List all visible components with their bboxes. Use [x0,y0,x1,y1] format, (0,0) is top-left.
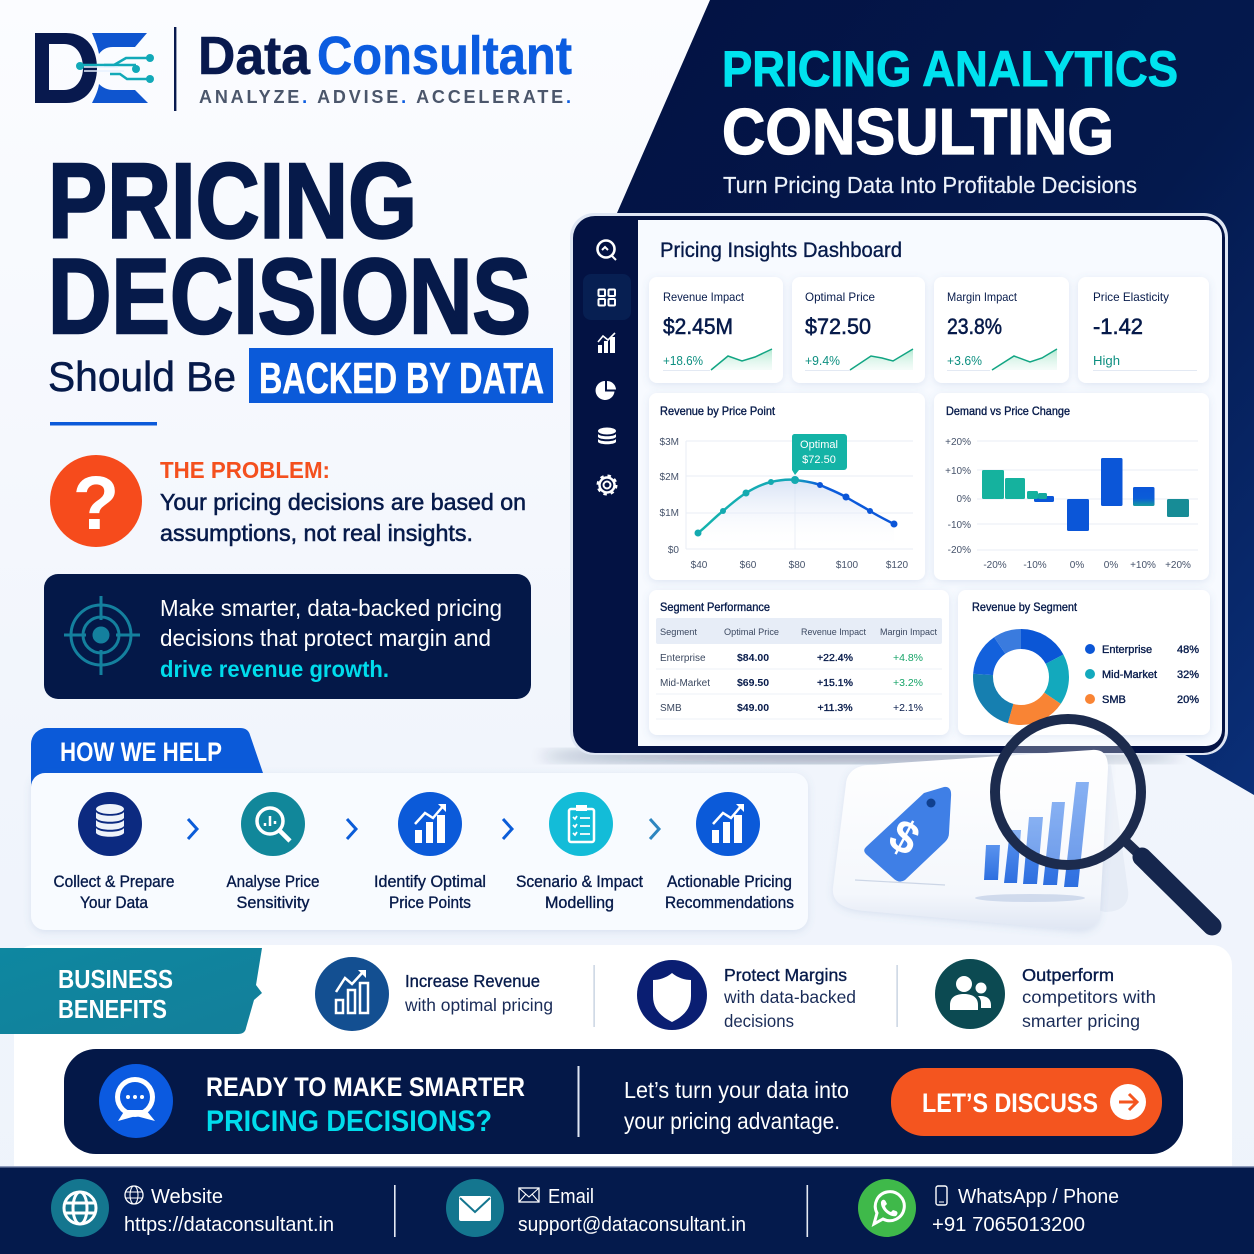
email [446,1179,746,1237]
arrow [503,819,512,839]
table: segment performance: Segment Performance [660,600,770,614]
benefits tab [0,948,262,1034]
KPI cards: +9.4% [805,353,840,368]
whatsapp [858,1179,1119,1237]
line chart: revenue by price point [649,393,925,580]
website: https://dataconsultant.in [124,1214,334,1236]
table: segment performance [649,590,949,735]
email: Email [548,1186,594,1208]
benefit 2 [637,960,856,1031]
how we help tab: HOW WE HELP [60,737,222,767]
bar chart: demand vs price change: -20% [983,560,1007,571]
KPI cards: Optimal Price [805,290,875,304]
benefit 1 [315,957,553,1031]
whatsapp: WhatsApp / Phone [958,1186,1119,1208]
step 4: Modelling [545,894,614,912]
donut chart: revenue by segment: 20% [1177,694,1199,706]
step 1 [54,792,174,912]
bar chart: demand vs price change: Demand vs Price Change [946,404,1070,418]
table: segment performance: Revenue Impact [801,627,866,638]
tagline: ANALYZE. ADVISE. ACCELERATE. [199,87,571,107]
logo [35,33,154,103]
step 1: Collect & Prepare [54,873,174,891]
arrow [188,819,197,839]
bar chart: demand vs price change: 0% [957,494,971,505]
KPI cards: $2.45M [663,314,733,339]
bar chart: demand vs price change: -10% [948,520,971,531]
call to action banner: your pricing advantage. [624,1108,840,1134]
footer [0,1166,1254,1254]
button: let's discuss: LET’S DISCUSS [922,1088,1098,1118]
KPI cards: $72.50 [805,314,871,339]
the problem text: Your pricing decisions are based on [160,489,526,515]
the problem text: assumptions, not real insights. [160,520,473,546]
bar chart: demand vs price change [934,393,1209,580]
call to action banner [64,1049,1183,1154]
table: segment performance: +2.1% [893,702,923,714]
the problem text [160,457,526,546]
benefits tab: BUSINESS [58,964,173,994]
how we help tab [31,728,263,790]
sparkline 3 [992,349,1057,370]
solution panel: decisions that protect margin and [160,625,491,651]
icon: question mark [50,455,142,547]
step 5 [665,792,794,912]
button: let's discuss [891,1068,1162,1136]
solution panel [44,574,531,699]
solution panel: drive revenue growth. [160,656,389,682]
brand name [198,26,572,86]
illustration: price tag, bars and magnifier [833,719,1212,930]
table: segment performance: Segment [660,627,697,638]
bar chart: demand vs price change: +10% [945,466,971,477]
step 4 [516,792,643,912]
line chart: revenue by price point: $60 [740,560,757,571]
dashboard tablet [570,213,1228,755]
table: segment performance: +11.3% [817,702,853,714]
table: segment performance: SMB [660,703,682,714]
bar chart: demand vs price change: 0% [1104,560,1118,571]
bar chart: demand vs price change: +10% [1130,560,1156,571]
bar chart: demand vs price change: -20% [948,545,971,556]
right title: Turn Pricing Data Into Profitable Decisions [723,172,1137,198]
table: segment performance: $69.50 [737,677,769,689]
bar chart: demand vs price change: +20% [945,437,971,448]
bars [984,782,1089,887]
right title [722,41,1178,198]
arrow [650,819,659,839]
tooltip: optimal price: $72.50 [802,454,836,466]
right title: CONSULTING [722,95,1114,168]
main heading: DECISIONS [48,236,531,356]
brand name: Data [198,26,311,86]
tablet shadow [540,749,1180,763]
donut chart: revenue by segment [958,590,1210,735]
line chart: revenue by price point: $120 [886,560,909,571]
KPI cards: +18.6% [663,353,703,368]
benefit 2: with data-backed [723,987,856,1007]
step 1: Your Data [80,894,149,912]
benefit 3: competitors with [1022,987,1156,1007]
KPI cards: Revenue Impact [663,290,745,304]
tooltip: optimal price [792,434,847,475]
line chart: revenue by price point: $2M [660,472,679,483]
KPI cards: 23.8% [947,314,1002,339]
line chart: revenue by price point: $40 [691,560,708,571]
step 5: Recommendations [665,894,794,912]
arrow [347,819,356,839]
donut chart: revenue by segment: Mid-Market [1102,669,1157,681]
navy diagonal background panel [617,0,1254,795]
KPI cards [649,277,1209,383]
step 5: Actionable Pricing [667,873,792,891]
donut chart: revenue by segment: 32% [1177,669,1199,681]
benefit 1: Increase Revenue [405,971,540,991]
step 4: Scenario & Impact [516,873,643,891]
table: segment performance: +3.2% [893,677,923,689]
icon: chat [99,1064,173,1138]
table: segment performance: Mid-Market [660,678,710,689]
table: segment performance: +22.4% [817,652,853,664]
KPI cards: -1.42 [1093,314,1143,339]
step 3: Identify Optimal [374,873,486,891]
call to action banner: Let’s turn your data into [624,1077,849,1103]
sidebar icons [583,240,631,494]
website [51,1179,334,1237]
line chart: revenue by price point: $0 [668,545,679,556]
call to action banner: READY TO MAKE SMARTER [206,1072,525,1102]
table: segment performance: $49.00 [737,702,769,714]
line chart: revenue by price point: $80 [789,560,806,571]
benefit 3: Outperform [1022,965,1114,985]
icon: question mark: ? [73,461,119,546]
bar chart: demand vs price change: 0% [1070,560,1084,571]
bar chart: demand vs price change: +20% [1165,560,1191,571]
benefit 2: Protect Margins [724,965,847,985]
table: segment performance: +4.8% [893,652,923,664]
email: support@dataconsultant.in [518,1214,746,1236]
right title: PRICING ANALYTICS [722,41,1178,97]
business benefits panel [0,945,1232,1185]
solution panel: Make smarter, data-backed pricing [160,595,502,621]
price tag: $ [881,808,928,866]
table: segment performance: +15.1% [817,677,853,689]
donut chart: revenue by segment: Revenue by Segment [972,600,1078,614]
benefits tab: BENEFITS [58,994,167,1024]
donut chart: revenue by segment: SMB [1102,694,1126,706]
sparkline 2 [850,349,913,370]
donut chart: revenue by segment: 48% [1177,644,1199,656]
KPI cards: Margin Impact [947,290,1018,304]
main heading: PRICING [48,140,417,260]
step 3: Price Points [389,894,471,912]
dashboard title: Pricing Insights Dashboard [660,238,902,262]
main heading: Should Be [48,353,236,400]
KPI cards: Price Elasticity [1093,290,1169,304]
line chart: revenue by price point: $1M [660,508,679,519]
the problem text: THE PROBLEM: [160,457,330,483]
main heading: BACKED BY DATA [259,354,544,403]
benefit 3: smarter pricing [1022,1011,1140,1031]
line chart: revenue by price point: $3M [660,437,679,448]
KPI cards: High [1093,353,1120,368]
website: Website [151,1186,223,1208]
magnifier [995,719,1212,926]
sparkline 1 [711,349,772,370]
whatsapp: +91 7065013200 [932,1214,1085,1236]
how we help panel [31,773,808,930]
benefit 3 [935,959,1156,1031]
icon: target [64,596,140,675]
line chart: revenue by price point: $100 [836,560,859,571]
step 2: Analyse Price [226,873,320,891]
line chart: revenue by price point: Revenue by Price Point [660,404,776,418]
step 2: Sensitivity [236,894,310,912]
KPI cards: +3.6% [947,353,982,368]
table: segment performance: $84.00 [737,652,769,664]
donut chart: revenue by segment: Enterprise [1102,644,1152,656]
bar chart: demand vs price change: -10% [1023,560,1047,571]
main heading [48,140,553,403]
step 2 [226,792,320,912]
brand name: Consultant [317,26,572,86]
table: segment performance: Margin Impact [880,627,937,638]
benefit 1: with optimal pricing [404,995,553,1015]
tooltip: optimal price: Optimal [800,439,838,451]
table: segment performance: Optimal Price [724,627,779,638]
table: segment performance: Enterprise [660,653,706,664]
step 3 [374,792,486,912]
benefit 2: decisions [724,1011,794,1031]
price tag [864,787,951,882]
call to action banner: PRICING DECISIONS? [206,1105,492,1138]
